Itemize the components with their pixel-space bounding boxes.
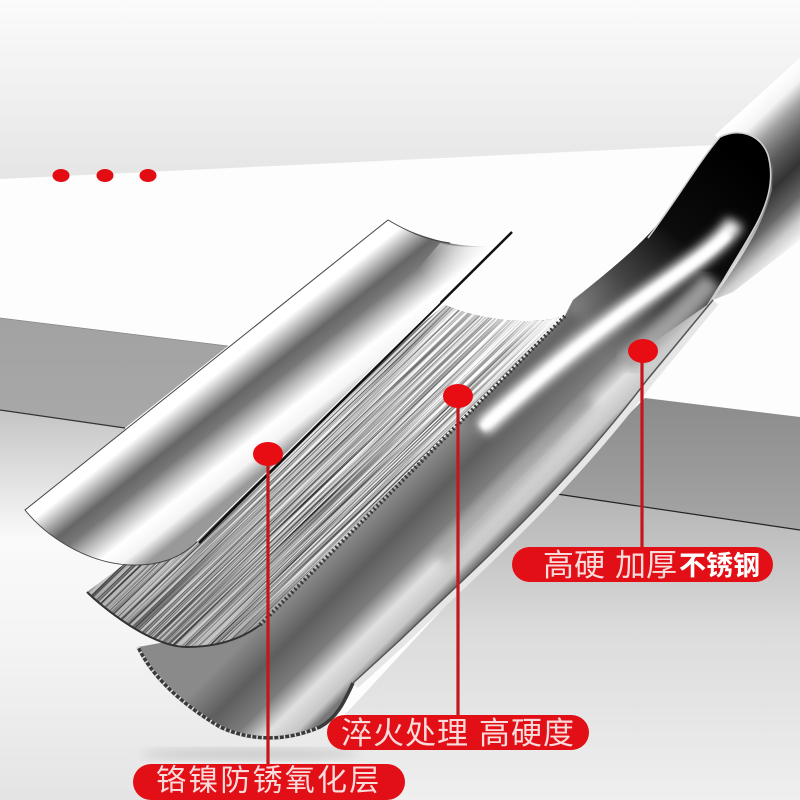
callout leader: chrome-nickel layer [253,442,283,770]
pale rim beside the tube [353,300,713,683]
label: high-hardness thick stainless steel: 高硬 [543,548,605,583]
left floor [0,410,400,800]
blade outer edges [25,220,450,565]
opening rim [648,133,771,300]
label: high-hardness thick stainless steel: 加厚 [615,548,677,583]
upper handle tube [713,58,800,300]
blade end fade [400,232,512,320]
label: high-hardness thick stainless steel: 不锈钢 [679,551,760,581]
scoop shading [440,315,590,560]
label: quenching treatment: 淬火处理 [341,716,469,751]
brushed texture [88,305,564,646]
layer: brushed quenched core [86,305,566,648]
steel tube: upper handle and scoop body [138,58,800,738]
scoop outer shell [138,137,773,738]
pipe cast shadow [140,748,360,760]
core edge lines [87,592,260,647]
callout leader: quenched core [443,384,473,720]
decorative three red dots [52,169,156,182]
label: chrome-nickel anti-rust oxide layer: 铬镍防锈氧化层 [156,764,381,798]
long interior reflection [482,222,735,428]
label: quenching treatment [327,715,589,751]
callout leader: stainless steel tube [628,339,658,550]
right wall [550,398,800,530]
upper grey backdrop band [0,0,800,179]
left grey wall [0,318,228,428]
label: quenching treatment: 高硬度 [479,716,575,751]
grey zone below the reflection [625,280,712,365]
serrated cut edge of scoop bottom [138,647,353,738]
scoop interior opening [560,133,771,380]
right floor [300,493,800,800]
label: high-hardness thick stainless steel [512,547,773,583]
layer: chrome-nickel outer blade [25,220,512,565]
